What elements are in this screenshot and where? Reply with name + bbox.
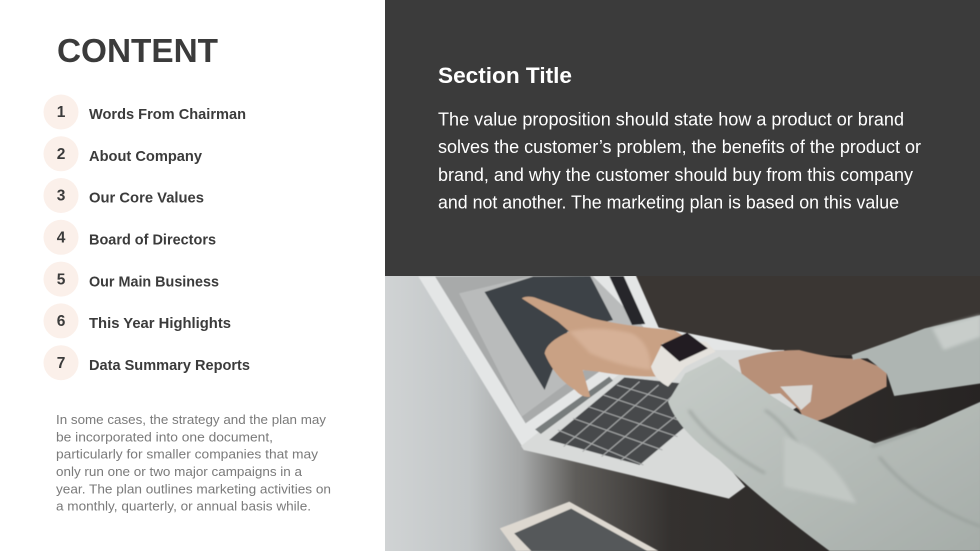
laptop base <box>521 350 803 499</box>
list item 6 <box>44 303 231 338</box>
keyboard <box>549 377 685 465</box>
description paragraph <box>56 412 331 514</box>
pointing hand <box>522 297 685 397</box>
list item 7: 7 <box>57 355 65 372</box>
white background panel <box>0 0 385 551</box>
photo: hands on a laptop <box>385 275 980 551</box>
dark panel <box>385 0 980 276</box>
section body text: solves the customer’s problem, the benefits of the product or <box>438 136 921 157</box>
description paragraph: be incorporated into one document, <box>56 429 273 444</box>
list item 2: 2 <box>57 146 65 163</box>
list item 1: 1 <box>57 104 66 121</box>
list item 3: Our Core Values <box>89 190 204 206</box>
description paragraph: In some cases, the strategy and the plan may <box>56 412 326 427</box>
contents list <box>44 94 250 380</box>
description paragraph: a monthly, quarterly, or annual basis while. <box>56 499 311 514</box>
right hand <box>738 350 887 423</box>
section body text: and not another. The marketing plan is based on this value <box>438 191 899 212</box>
heading: CONTENT: CONTENT <box>57 33 219 70</box>
list item 7 <box>44 345 250 380</box>
near sleeve <box>668 357 980 551</box>
section body text: The value proposition should state how a product or brand <box>438 108 904 130</box>
list item 5 <box>44 262 219 297</box>
section body text <box>438 108 921 212</box>
list item 2 <box>44 136 203 171</box>
list item 6: 6 <box>57 313 66 330</box>
description paragraph: only run one or two major campaigns in a <box>56 464 303 479</box>
list item 3 <box>44 178 204 213</box>
desk with foggy foreground <box>385 275 980 551</box>
list item 4: Board of Directors <box>89 232 216 248</box>
smartwatch <box>651 342 716 387</box>
list item 4 <box>44 220 216 255</box>
list item 5: 5 <box>57 271 66 288</box>
section title: Section Title <box>438 63 572 88</box>
phone <box>500 502 659 551</box>
list item 2: About Company <box>89 149 203 165</box>
list item 6: This Year Highlights <box>89 316 231 332</box>
laptop screen <box>418 275 980 551</box>
far cuff <box>852 315 980 396</box>
list item 1 <box>44 94 246 130</box>
list item 5: Our Main Business <box>89 274 219 290</box>
list item 4: 4 <box>57 230 66 246</box>
list item 3: 3 <box>57 188 66 204</box>
description paragraph: particularly for smaller companies that may <box>56 447 318 462</box>
description paragraph: year. The plan outlines marketing activities on <box>56 481 331 496</box>
list item 1: Words From Chairman <box>89 107 246 123</box>
list item 7: Data Summary Reports <box>89 358 250 374</box>
section body text: brand, and why the customer should buy from this company <box>438 164 914 185</box>
